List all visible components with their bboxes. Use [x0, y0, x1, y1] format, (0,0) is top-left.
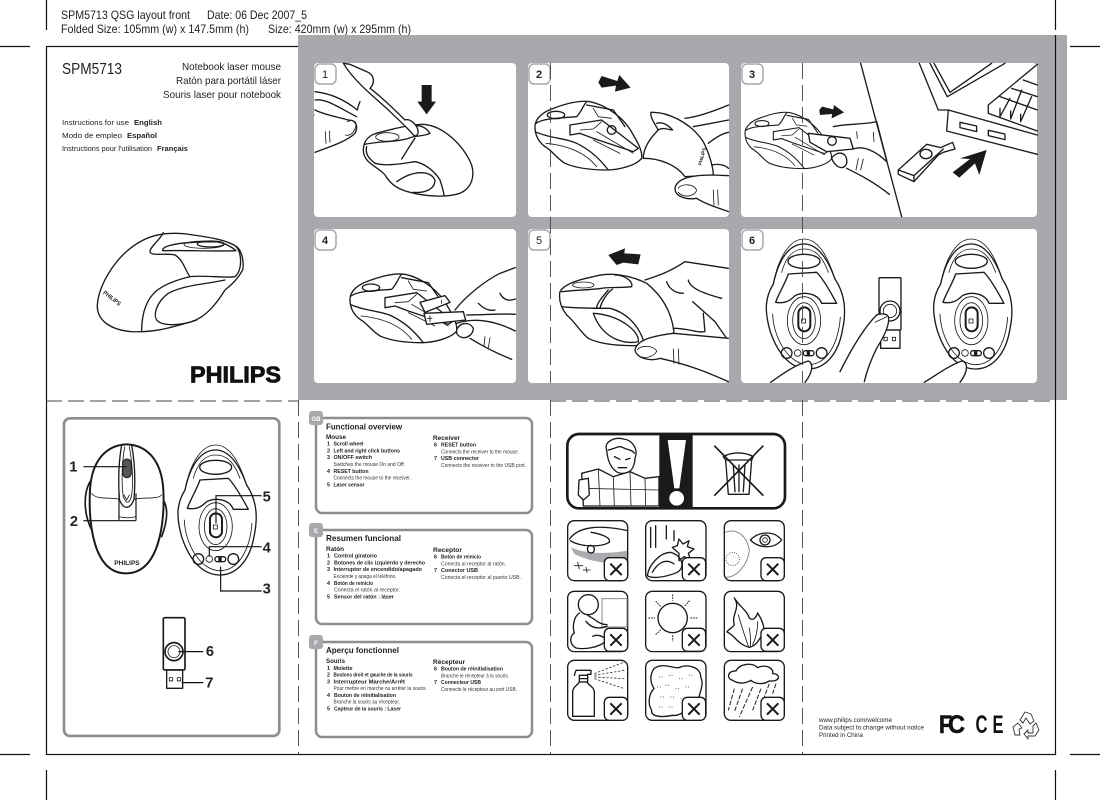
- receiver parts list: Connects the receiver to the mouse.: [441, 450, 519, 456]
- heading: Aperçu fonctionnel: [326, 645, 399, 655]
- PHILIPS logo: PHILIPS: [190, 362, 281, 388]
- panel: French functional overview: [309, 635, 532, 737]
- callout lines and numbers: 7: [205, 675, 213, 691]
- mouse parts list: Bouton de réinitialisation: [334, 693, 396, 699]
- fold lines: [46, 400, 1055, 754]
- receiver parts list: Botón de reinicio: [441, 554, 482, 560]
- cover heading block: Souris laser pour notebook: [163, 89, 282, 101]
- callout lines and numbers: 4: [263, 541, 272, 557]
- icon: keep away from fire: [724, 591, 784, 652]
- icon: CE mark: C: [976, 711, 988, 739]
- print job header: Size: 420mm (w) x 295mm (h): [268, 22, 411, 36]
- footer notice: [818, 718, 925, 739]
- icon: do not drop: [646, 521, 706, 581]
- panel: step 6: [741, 229, 1037, 383]
- language list: [62, 118, 188, 153]
- panel: Spanish functional overview: [309, 523, 532, 624]
- mouse parts list: Left and right click buttons: [334, 448, 400, 454]
- icon: avoid dust: [646, 660, 706, 720]
- illustration: pairing mouse and receiver: [766, 239, 1012, 382]
- mouse parts list: [326, 435, 411, 488]
- icon: avoid rain: [724, 660, 784, 720]
- panel: warning icons: [567, 434, 785, 720]
- mouse parts list: [326, 547, 426, 600]
- mouse parts list: 1: [327, 666, 330, 672]
- receiver parts list: [433, 436, 526, 469]
- footer notice: Printed in China: [819, 733, 864, 739]
- receiver parts list: Branche le récepteur à la souris.: [441, 674, 509, 680]
- mouse parts list: ON/OFF switch: [334, 455, 372, 461]
- panel: product diagram: [64, 418, 279, 736]
- mouse parts list: 3: [327, 680, 330, 686]
- mouse parts list: [326, 659, 427, 712]
- icon: do not look into laser: [724, 521, 784, 581]
- callout lines and numbers: 6: [206, 644, 214, 660]
- heading: Resumen funcional: [326, 533, 401, 543]
- panel: step 4: [314, 229, 516, 383]
- step number 4: [315, 230, 336, 250]
- icon: cover mouse: PHILIPS: [101, 290, 121, 308]
- illustration: removing battery cover: [535, 75, 729, 212]
- callout lines and numbers: 5: [263, 490, 271, 506]
- language tab E: E: [314, 529, 318, 535]
- receiver parts list: Conecta al receptor al ratón.: [441, 562, 506, 568]
- illustration: removing battery cover: PHILIPS: [697, 147, 707, 166]
- receiver parts list: Connecte le récepteur au port USB.: [441, 687, 517, 693]
- mouse parts list: Sensor del ratón : láser: [334, 594, 395, 600]
- icon: cover mouse: [97, 233, 243, 332]
- step number 2: [529, 64, 550, 84]
- receiver parts list: Receiver: [433, 436, 461, 442]
- callout lines and numbers: 2: [70, 514, 78, 530]
- step number 6: [742, 230, 763, 250]
- receiver parts list: RESET button: [441, 442, 476, 448]
- step number 5: [529, 230, 550, 250]
- mouse parts list: Interrupteur Marche/Arrêt: [334, 680, 405, 686]
- mouse parts list: Boutons droit et gauche de la souris: [334, 672, 412, 678]
- mouse parts list: Ratón: [326, 547, 344, 553]
- step number 4: 4: [322, 235, 329, 247]
- mouse parts list: Switches the mouse On and Off.: [334, 462, 405, 468]
- mouse parts list: Connects the mouse to the receiver.: [334, 476, 411, 482]
- mouse parts list: 5: [327, 594, 330, 600]
- mouse parts list: 1: [327, 442, 330, 448]
- mouse parts list: Control giratorio: [334, 554, 378, 560]
- step number 5: 5: [536, 235, 542, 247]
- icon: CE mark: [976, 711, 1004, 739]
- step number 1: [315, 64, 336, 84]
- icon: FCC mark: C: [948, 711, 965, 739]
- mouse parts list: 5: [327, 706, 330, 712]
- language list: Modo de empleo: [62, 131, 122, 140]
- mouse parts list: Molette: [334, 666, 352, 672]
- illustration: inserting batteries: [350, 268, 515, 359]
- icon: FCC mark: [939, 711, 965, 739]
- heading: Functional overview: [326, 422, 402, 432]
- mouse parts list: Botón de reinicio: [334, 581, 374, 587]
- illustration: finger pressing mouse release: [315, 63, 473, 196]
- mouse parts list: Botones de clic izquierdo y derecho: [334, 560, 426, 566]
- step number 3: [742, 64, 763, 84]
- mouse parts list: 3: [327, 455, 330, 461]
- receiver parts list: Connecteur USB: [441, 680, 481, 686]
- mouse parts list: Scroll wheel: [334, 442, 364, 448]
- receiver parts list: 6: [434, 442, 437, 448]
- cover heading block: Ratón para portátil láser: [176, 75, 281, 87]
- language tab F: [309, 635, 323, 649]
- icon: FCC mark: F: [939, 711, 952, 739]
- receiver parts list: [433, 660, 517, 693]
- mouse parts list: 2: [327, 672, 330, 678]
- mouse parts list: 3: [327, 567, 330, 573]
- cover heading block: SPM5713: [62, 61, 122, 78]
- language tab GB: [309, 411, 323, 425]
- receiver parts list: USB connector: [441, 456, 480, 462]
- step number 2: 2: [536, 69, 542, 81]
- icon: no sprays: [568, 660, 628, 720]
- step number 3: 3: [749, 69, 755, 81]
- language list: Instructions pour l'utilisation: [62, 144, 152, 153]
- footer notice: Data subject to change without notice: [819, 726, 925, 732]
- language tab F: F: [314, 641, 318, 647]
- mouse parts list: Capteur de la souris : Laser: [334, 706, 402, 712]
- receiver parts list: [433, 548, 521, 581]
- icon: do not use on glass: [568, 521, 628, 581]
- fold lines over steps: [550, 63, 802, 383]
- callout lines and numbers: 1: [69, 460, 77, 476]
- receiver parts list: Conecta el receptor al puerto USB.: [441, 575, 521, 581]
- print job header: [61, 8, 411, 36]
- receiver parts list: Connects the receiver to the USB port.: [441, 463, 526, 469]
- receiver parts list: 7: [434, 568, 437, 574]
- mouse parts list: 2: [327, 448, 330, 454]
- language tab E: [309, 523, 323, 537]
- mouse parts list: 5: [327, 482, 330, 488]
- receiver parts list: Bouton de réinitialisation: [441, 666, 503, 672]
- print job header: Date: 06 Dec 2007_5: [207, 8, 307, 22]
- receiver parts list: 7: [434, 680, 437, 686]
- callout lines and numbers: [69, 460, 272, 691]
- icon: mouse bottom view: [178, 445, 256, 575]
- print job header: SPM5713 QSG layout front: [61, 8, 191, 22]
- language list: Français: [157, 144, 188, 153]
- icon: mouse top view: [85, 444, 167, 573]
- panel: step 3: [741, 63, 1037, 217]
- footer notice: www.philips.com/welcome: [818, 718, 893, 724]
- language list: Instructions for use: [62, 118, 129, 127]
- mouse parts list: 4: [327, 469, 330, 475]
- print job header: Folded Size: 105mm (w) x 147.5mm (h): [61, 22, 249, 36]
- mouse parts list: Enciende y apaga el teléfono.: [334, 574, 396, 580]
- panel: step 1: [314, 63, 516, 217]
- language list: English: [134, 118, 162, 127]
- step number 1: 1: [322, 69, 328, 81]
- gray steps background: [298, 35, 1067, 400]
- mouse parts list: Souris: [326, 659, 346, 665]
- illustration: replacing battery cover: [560, 248, 729, 382]
- icon: mouse top view: PHILIPS: [114, 561, 140, 567]
- mouse parts list: RESET button: [334, 469, 368, 475]
- cover heading block: Notebook laser mouse: [182, 61, 281, 73]
- icon: keep away from sunlight: [646, 591, 706, 652]
- cover heading block: [62, 61, 282, 101]
- mouse parts list: Branche la souris au récepteur.: [334, 700, 400, 706]
- icon: keep away from children: [568, 591, 628, 652]
- icon: recycling: [1013, 712, 1039, 739]
- callout lines and numbers: 3: [263, 581, 271, 597]
- mouse parts list: 2: [327, 560, 330, 566]
- receiver parts list: 6: [434, 666, 437, 672]
- mouse parts list: 1: [327, 554, 330, 560]
- warning banner: [567, 434, 785, 508]
- receiver parts list: Conector USB: [441, 568, 478, 574]
- mouse parts list: Pour mettre en marche ou arrêter la souris.: [334, 686, 427, 692]
- mouse parts list: Conecta el ratón al receptor.: [334, 588, 400, 594]
- mouse parts list: Mouse: [326, 435, 347, 441]
- receiver parts list: Receptor: [433, 548, 463, 554]
- illustration: plugging receiver into laptop: [745, 63, 1037, 217]
- panel: English functional overview: [309, 411, 532, 513]
- receiver parts list: 7: [434, 456, 437, 462]
- icon: CE mark: E: [992, 711, 1004, 739]
- mouse parts list: Interruptor de encendido/apagado: [334, 567, 423, 573]
- language list: Español: [127, 131, 157, 140]
- mouse parts list: 4: [327, 581, 330, 587]
- step number 6: 6: [749, 235, 755, 247]
- receiver parts list: 6: [434, 554, 437, 560]
- panel: step 2: [528, 63, 729, 217]
- mouse parts list: Laser sensor: [334, 482, 365, 488]
- panel: step 5: [528, 229, 729, 383]
- receiver parts list: Récepteur: [433, 660, 466, 666]
- icon: receiver: [163, 618, 185, 688]
- mouse parts list: 4: [327, 693, 330, 699]
- language tab GB: GB: [312, 417, 321, 423]
